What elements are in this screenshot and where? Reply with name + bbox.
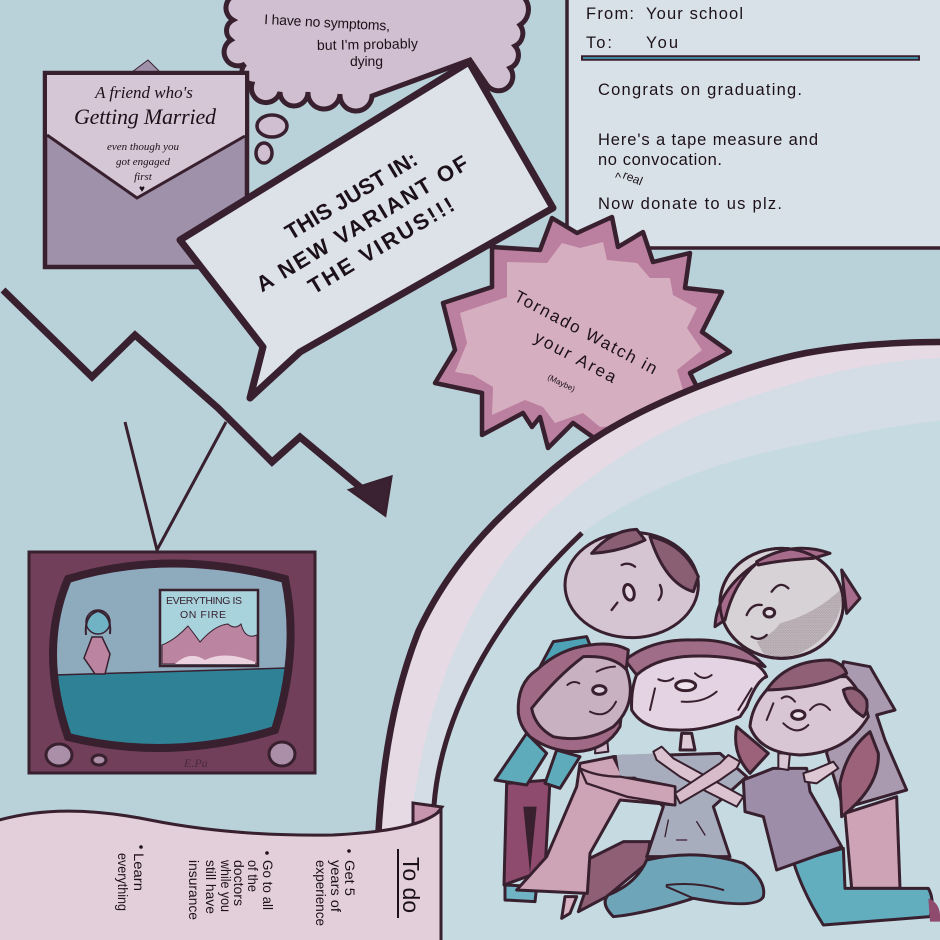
to-do scroll — [0, 803, 442, 940]
graphic caption — [166, 595, 242, 621]
letter body: Now donate to us plz. — [598, 195, 782, 213]
thought text: dying — [350, 53, 383, 69]
list item: doctors: still have — [203, 860, 219, 914]
headline: THE VIRUS!!! — [304, 192, 459, 299]
list item: doctors: insurance — [186, 860, 202, 920]
person: right, kneeling — [736, 660, 940, 925]
list item: learn — [115, 845, 147, 911]
person: seated centre body — [578, 733, 764, 917]
head: top right, bearded — [715, 548, 860, 658]
list item: experience: years of — [328, 860, 344, 912]
letter header: From: — [586, 5, 634, 23]
invitation text: ♥ — [139, 184, 145, 195]
invitation text: even though you — [107, 141, 180, 153]
tv knobs — [46, 742, 295, 766]
graphic caption: EVERYTHING IS — [166, 595, 242, 607]
invitation text — [74, 83, 217, 195]
list item: experience — [313, 849, 358, 926]
head: top — [565, 529, 698, 638]
letter body: Congrats on graduating. — [598, 81, 802, 99]
list item: doctors: Go to all — [260, 860, 276, 910]
invitation text: first — [134, 171, 153, 183]
thought text: I have no symptoms, — [264, 11, 391, 34]
list item: experience: experience — [313, 860, 329, 926]
television — [29, 552, 315, 773]
breaking news speech bubble — [180, 62, 553, 398]
letter header — [586, 5, 743, 52]
graphic caption: ON FIRE — [180, 609, 226, 621]
news graphic — [160, 590, 258, 666]
person: back left, teal jacket — [495, 637, 593, 902]
list item: learn: Learn — [131, 853, 147, 891]
headline: A NEW VARIANT OF — [252, 150, 473, 297]
headline: THIS JUST IN: — [280, 146, 422, 245]
panel: graduation letter — [567, 0, 940, 248]
invitation text: Getting Married — [74, 104, 217, 129]
news anchor — [84, 610, 110, 674]
list item: doctors: doctors — [231, 860, 247, 906]
starburst text: your Area — [531, 328, 620, 387]
letter body: ^ — [615, 170, 622, 185]
protective bubble — [378, 342, 940, 940]
list item: doctors — [186, 851, 276, 920]
list item: experience: Get 5 — [342, 860, 358, 896]
hugging family — [495, 529, 940, 925]
letter body — [598, 81, 818, 213]
person: left, pink dress — [517, 644, 675, 918]
thought text — [264, 11, 418, 69]
list item: learn: everything — [115, 853, 131, 911]
falling trend arrow — [3, 290, 391, 515]
thought bubbles — [256, 115, 287, 163]
letter body: Here's a tape measure and — [598, 131, 818, 149]
head: centre — [625, 640, 767, 730]
to-do heading: To do — [398, 857, 424, 913]
thought cloud — [224, 0, 528, 111]
letter header: To: — [586, 34, 612, 52]
letter header: Your school — [646, 5, 743, 23]
tv antenna — [125, 422, 226, 550]
letter header: You — [646, 34, 678, 52]
person: back right, lavender shirt — [827, 662, 907, 888]
starburst text: Tornado Watch in — [511, 287, 660, 378]
scroll curl — [413, 803, 442, 826]
envelope — [45, 60, 247, 267]
list item: doctors: of the — [245, 860, 261, 892]
crossed arms — [580, 747, 743, 807]
invitation text: got engaged — [116, 156, 171, 168]
arrowhead — [350, 477, 391, 515]
letter body: real — [621, 168, 645, 188]
thought text: but I'm probably — [317, 35, 418, 53]
tv screen — [53, 564, 291, 748]
invitation text: A friend who's — [94, 83, 193, 102]
tornado watch starburst — [435, 217, 730, 448]
starburst text: (Maybe) — [546, 373, 577, 394]
list item: doctors: while you — [218, 859, 234, 912]
signature: E.Pa — [183, 756, 208, 770]
letter body: no convocation. — [598, 151, 722, 169]
